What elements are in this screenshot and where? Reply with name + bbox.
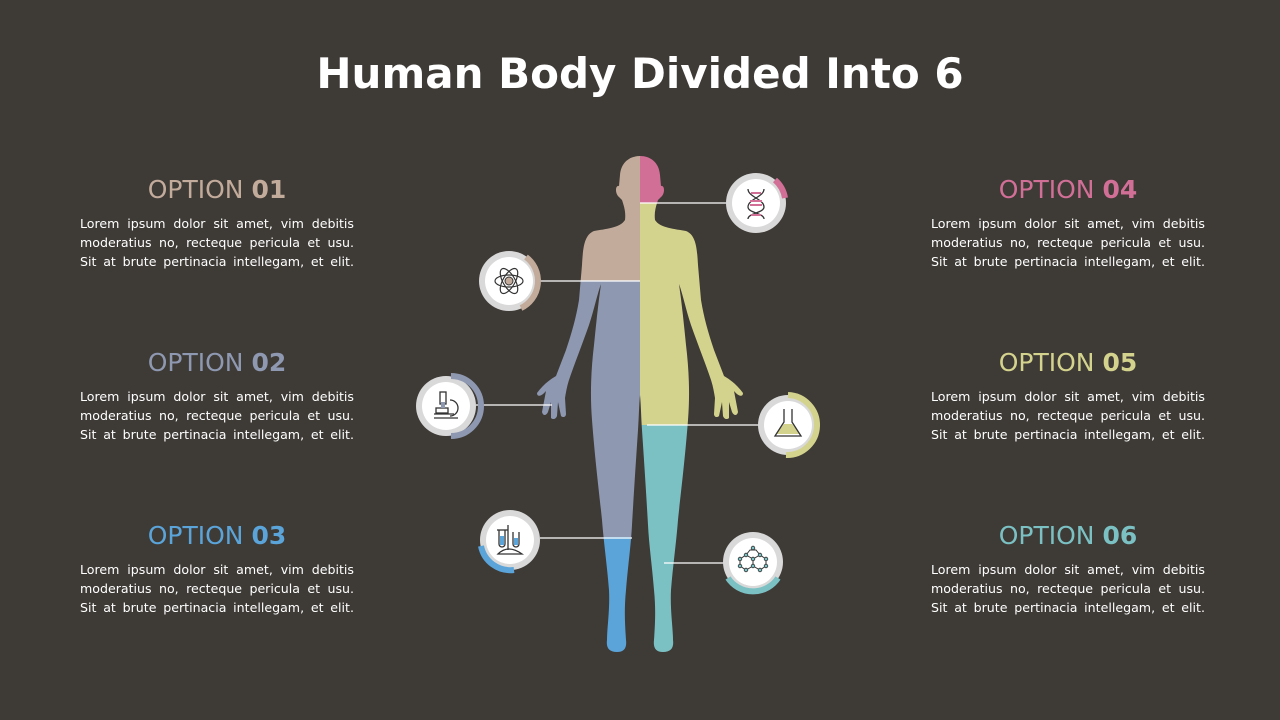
option 05 text: Sit at brute pertinacia intellegam, et elit. [931,427,1205,442]
option 06 text: Sit at brute pertinacia intellegam, et elit. [931,600,1205,615]
option 05 text: Lorem ipsum dolor sit amet, vim debitis [931,389,1205,404]
title: Human Body Divided Into 6 [316,49,964,98]
option 01 text: moderatius no, recteque pericula et usu. [80,235,354,250]
option 02 text: Sit at brute pertinacia intellegam, et elit. [80,427,354,442]
option 03 text: moderatius no, recteque pericula et usu. [80,581,354,596]
connector lines [476,203,759,563]
option 04 text: OPTION 04 [999,175,1137,204]
option 03 text [80,521,354,615]
icon: DNA [726,173,786,233]
option 03 text: Lorem ipsum dolor sit amet, vim debitis [80,562,354,577]
option 04 text: Sit at brute pertinacia intellegam, et elit. [931,254,1205,269]
body: right half [640,156,743,652]
option 02 text: Lorem ipsum dolor sit amet, vim debitis [80,389,354,404]
option 01 text: Lorem ipsum dolor sit amet, vim debitis [80,216,354,231]
icon: atom [479,251,539,311]
icon: molecule [723,532,783,592]
option 05 text [931,348,1205,442]
body: left half [537,156,640,652]
option 04 text: Lorem ipsum dolor sit amet, vim debitis [931,216,1205,231]
option 01 text: Sit at brute pertinacia intellegam, et elit. [80,254,354,269]
option 04 text: moderatius no, recteque pericula et usu. [931,235,1205,250]
icon: microscope [416,376,481,436]
option 03 text: Sit at brute pertinacia intellegam, et elit. [80,600,354,615]
option 02 text: moderatius no, recteque pericula et usu. [80,408,354,423]
icon: flask [758,395,818,455]
body figure and icons [416,156,820,652]
option 02 text: OPTION 02 [148,348,286,377]
icon: test tubes [480,510,540,570]
option 05 text: moderatius no, recteque pericula et usu. [931,408,1205,423]
option 06 text [931,521,1205,615]
option 05 text: OPTION 05 [999,348,1137,377]
option 01 text: OPTION 01 [148,175,286,204]
option 03 text: OPTION 03 [148,521,286,550]
option 06 text: Lorem ipsum dolor sit amet, vim debitis [931,562,1205,577]
option 06 text: OPTION 06 [999,521,1137,550]
option 06 text: moderatius no, recteque pericula et usu. [931,581,1205,596]
option 02 text [80,348,354,442]
option 01 text [80,175,354,269]
option 04 text [931,175,1205,269]
